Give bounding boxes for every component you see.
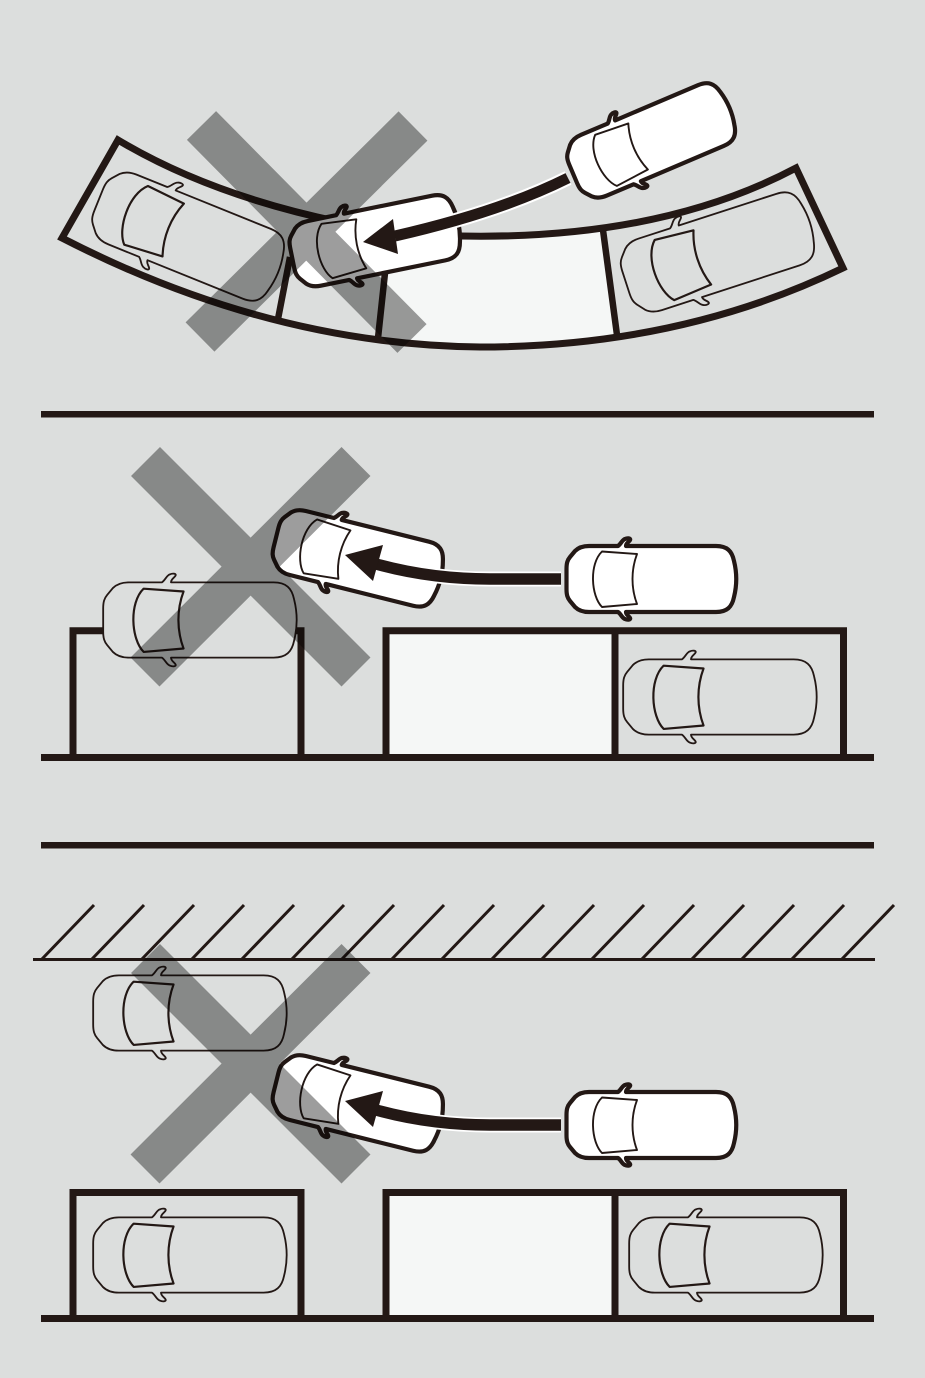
panel: curved parking [62,70,843,347]
parked car right [629,1209,823,1301]
cross mark [200,126,413,338]
stall outlines [73,631,844,757]
panel: parking near wall [33,905,894,1322]
hatched wall [33,905,894,960]
empty parking space [389,1196,612,1316]
curved stall outline [62,140,843,347]
stall outlines [73,1192,844,1318]
parked car left [103,574,297,666]
panel: straight parking beside cars [41,462,874,761]
moving car end [266,1043,451,1163]
parked car right [623,651,817,743]
moving car start [566,538,736,620]
base line [41,754,874,761]
moving car start [566,1084,736,1166]
empty parking space [378,230,617,346]
moving car end [266,498,451,618]
divider line [41,842,874,848]
cross mark [145,958,356,1169]
moving car end [284,184,467,298]
parked car right [612,178,824,326]
stall dividers [278,230,617,338]
base line [41,1315,874,1322]
cross mark [145,462,356,672]
parked car by wall [93,967,287,1059]
arrow [345,1091,561,1127]
arrow [345,545,561,581]
arrow [363,178,568,254]
divider line [41,411,874,418]
moving car start [557,70,745,211]
empty parking space [389,634,612,754]
parked car left [93,1209,287,1301]
parked car left [81,157,295,315]
